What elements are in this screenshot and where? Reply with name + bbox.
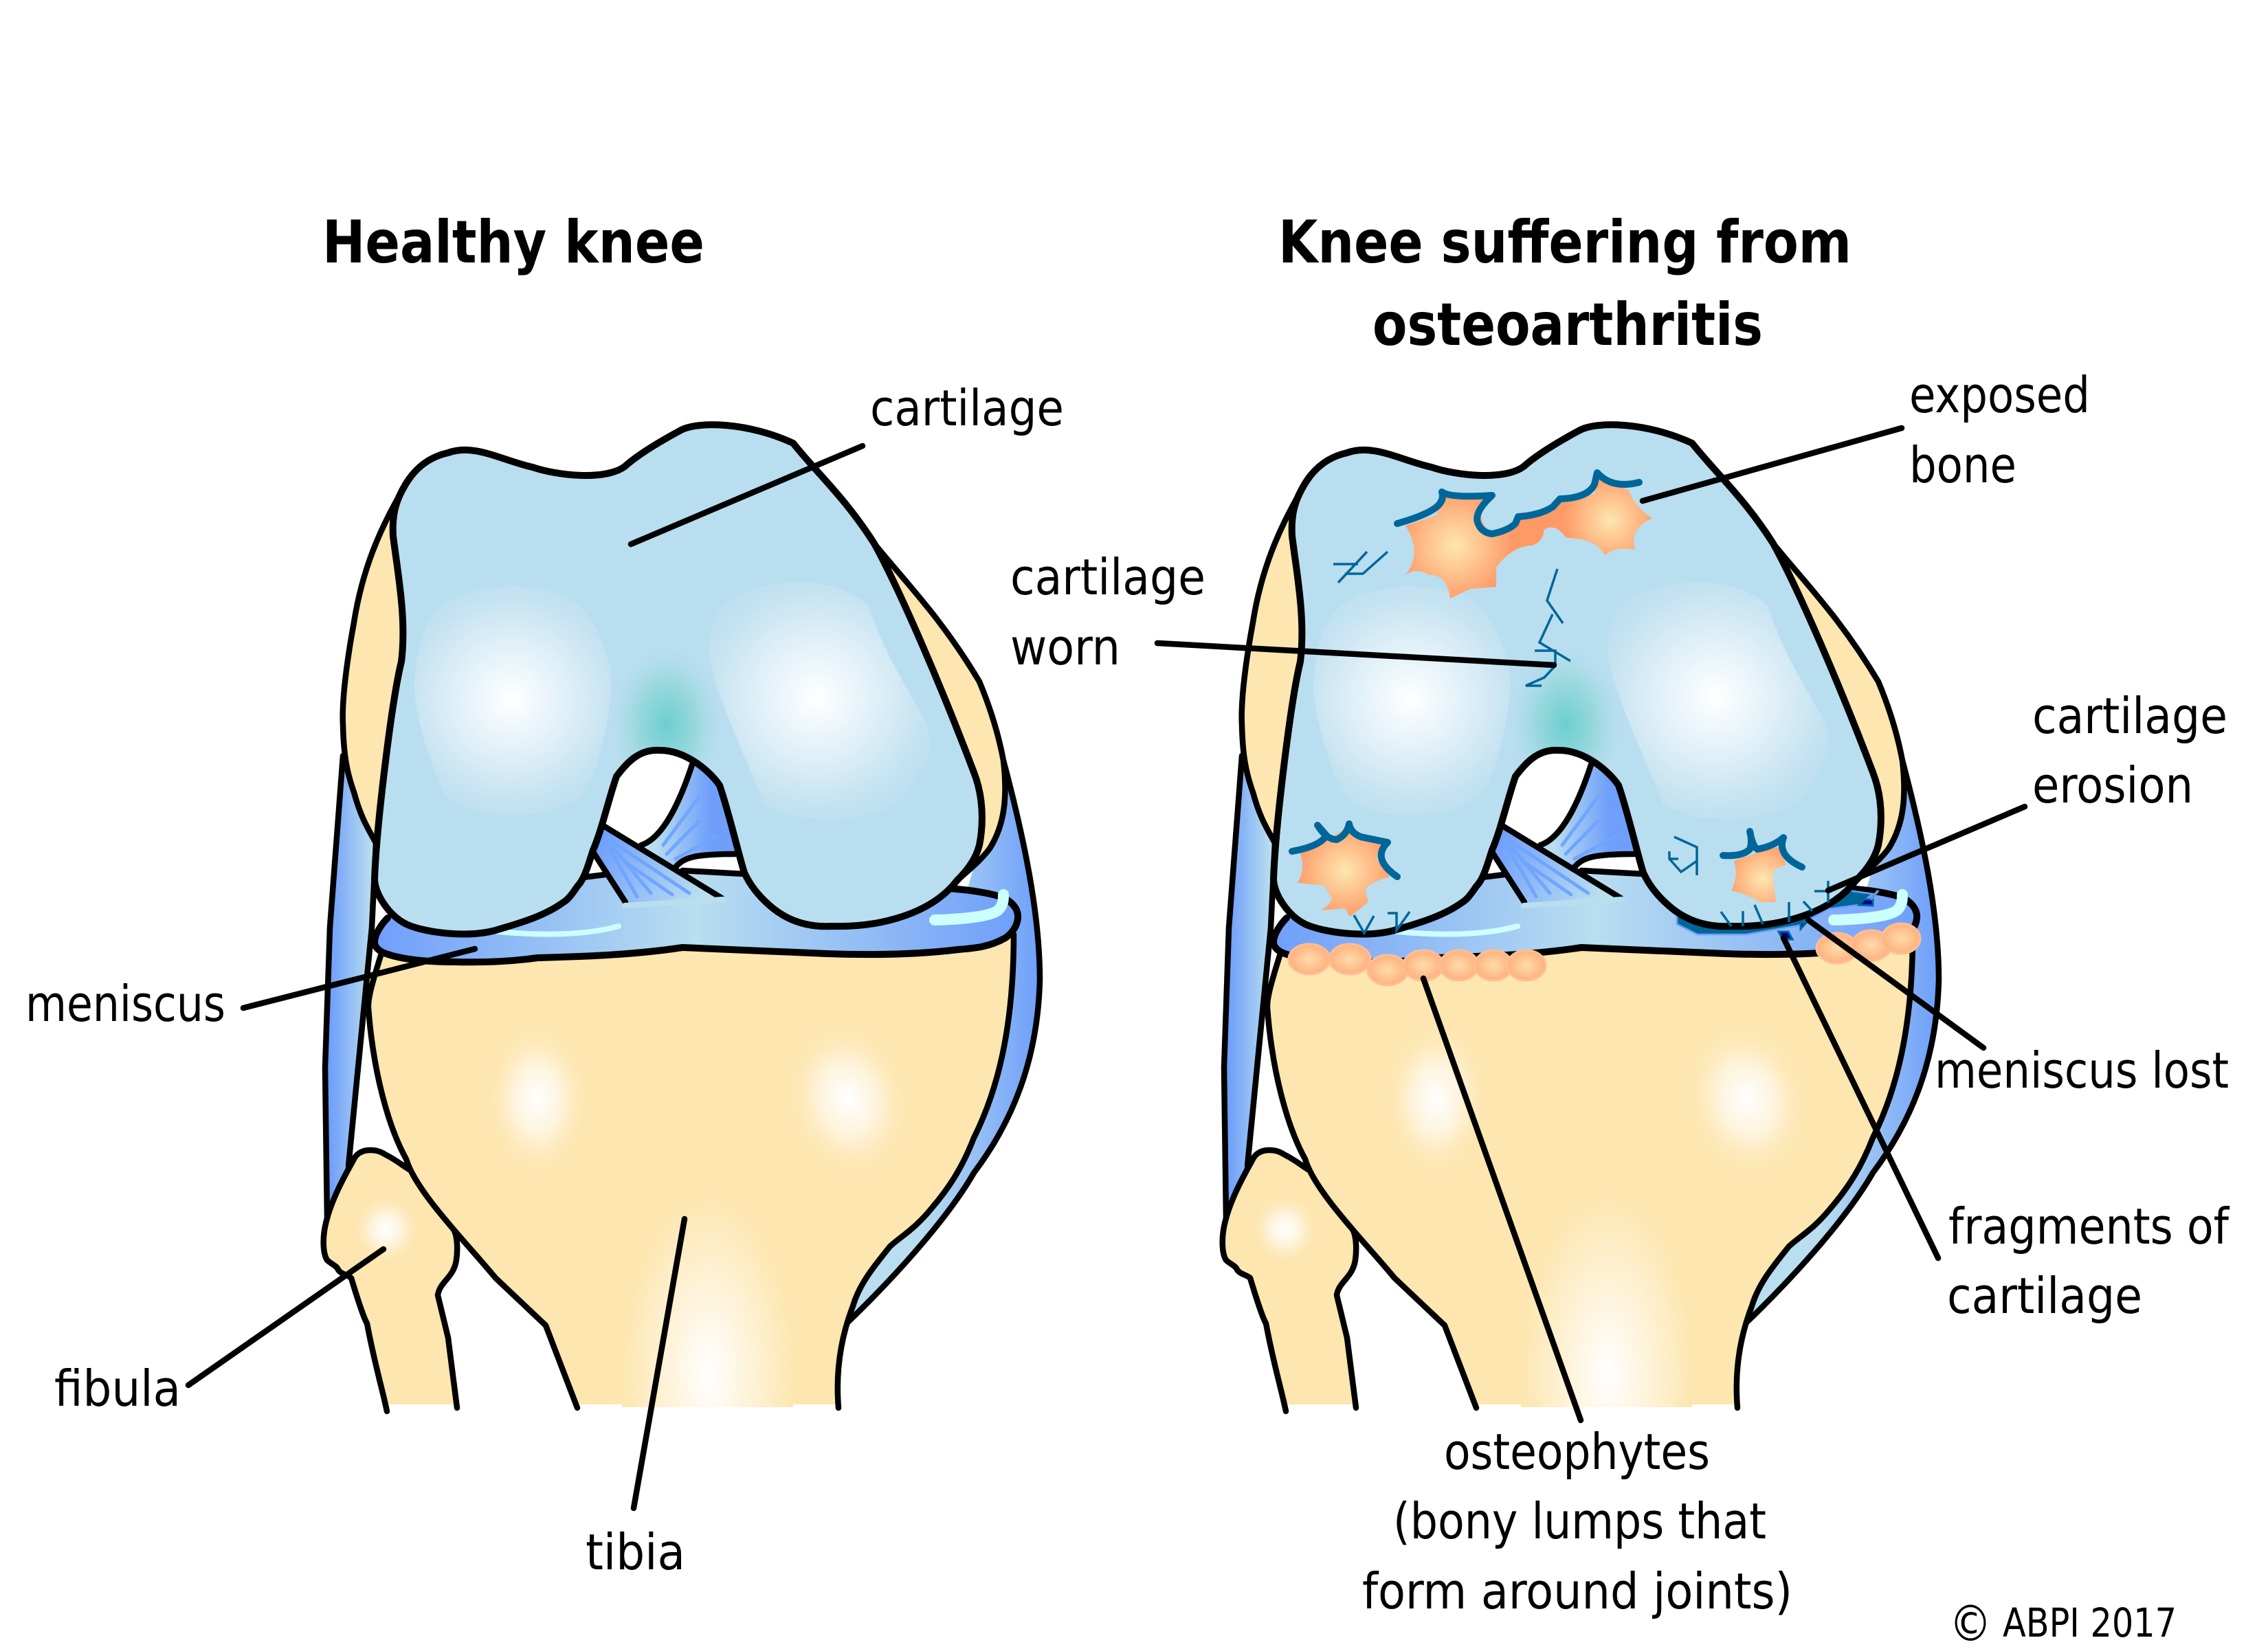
cartilage cracks	[1333, 552, 1828, 933]
label: meniscus (healthy)	[25, 949, 475, 1033]
label: meniscus lost	[1808, 920, 2229, 1099]
fibula	[1223, 1150, 1356, 1411]
label: cartilage worn: cartilage	[1010, 548, 1205, 606]
label: fragments of cartilage	[1783, 938, 2230, 1325]
label: exposed bone	[1643, 366, 2090, 501]
label: fragments of cartilage: fragments of	[1948, 1198, 2230, 1255]
label: fibula	[54, 1249, 383, 1417]
label: exposed bone: bone	[1909, 436, 2016, 494]
cruciate ligaments	[1482, 756, 1643, 906]
label: cartilage erosion	[1828, 687, 2227, 890]
label: osteophytes: osteophytes	[1444, 1423, 1710, 1481]
label: osteophytes: (bony lumps that	[1393, 1492, 1766, 1550]
label: osteophytes: form around joints)	[1362, 1562, 1792, 1620]
diagram: healthy knee	[324, 425, 1040, 1411]
label: cartilage (healthy): cartilage	[870, 379, 1064, 437]
label: cartilage (healthy)	[631, 379, 1064, 544]
label: osteophytes	[1362, 978, 1792, 1620]
label: exposed bone: exposed	[1909, 366, 2090, 424]
lateral ligament, left	[325, 756, 376, 1220]
diagram: knee with osteoarthritis	[1223, 425, 1939, 1411]
lateral ligament, right	[1747, 761, 1939, 1322]
fibula	[324, 1150, 457, 1411]
label: fibula: fibula	[54, 1360, 181, 1417]
label: meniscus lost: meniscus lost	[1935, 1042, 2229, 1099]
exposed bone: lower left patch	[1292, 824, 1397, 917]
lateral ligament, right	[848, 761, 1040, 1322]
exposed bone: lower right patch	[1723, 831, 1802, 902]
label: fragments of cartilage: cartilage	[1947, 1267, 2142, 1325]
label: tibia	[586, 1219, 685, 1581]
meniscus highlights	[493, 895, 1003, 934]
patella cartilage, left side	[1242, 484, 1311, 843]
meniscus	[375, 873, 1018, 962]
cartilage erosion band	[1677, 890, 1878, 939]
label: cartilage worn	[1010, 548, 1554, 676]
label: tibia: tibia	[586, 1523, 685, 1581]
copyright	[1949, 1595, 2177, 1649]
tibia	[1267, 934, 1913, 1408]
label: cartilage erosion: erosion	[2032, 756, 2193, 814]
patella cartilage, right side	[1773, 543, 1904, 881]
exposed bone: upper patches	[1397, 473, 1652, 598]
heading: knee suffering from osteoarthritis: osteoarthritis	[1372, 291, 1763, 359]
tibia	[368, 934, 1014, 1408]
heading: knee suffering from osteoarthritis	[1278, 208, 1852, 359]
femur cartilage	[375, 425, 982, 934]
label: cartilage worn: worn	[1010, 618, 1120, 676]
copyright: ABPI 2017	[2003, 1600, 2177, 1646]
label: cartilage erosion: cartilage	[2032, 687, 2227, 745]
osteophytes	[1289, 923, 1920, 985]
heading: healthy knee: Healthy knee	[322, 208, 704, 277]
femur cartilage	[1274, 425, 1881, 934]
lateral ligament, left	[1224, 756, 1275, 1220]
heading: knee suffering from osteoarthritis: Knee suffering from	[1278, 208, 1852, 277]
label: meniscus (healthy): meniscus	[25, 975, 225, 1033]
patella cartilage, left side	[343, 484, 412, 843]
meniscus	[1274, 873, 1917, 962]
patella cartilage, right side	[874, 543, 1005, 881]
cruciate ligaments	[583, 756, 744, 906]
meniscus highlights	[1392, 895, 1902, 934]
